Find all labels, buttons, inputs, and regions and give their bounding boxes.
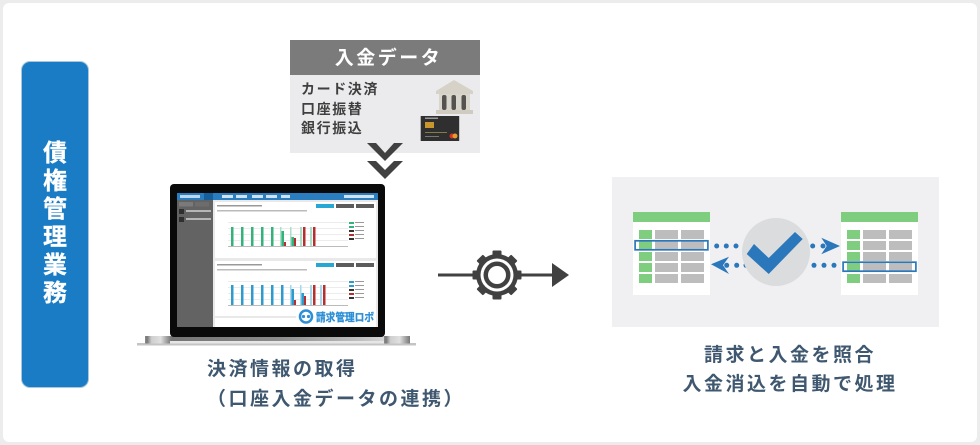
text: reconciliation description: 請求と入金を照合: [704, 345, 876, 366]
sidebar: [177, 200, 213, 327]
text: payment methods: [301, 81, 379, 136]
laptop with billing dashboard: [137, 184, 416, 346]
heading: 入金データ: 入金データ: [335, 48, 442, 69]
text: reconciliation description: 入金消込を自動で処理: [682, 374, 898, 395]
panel: payment data: [290, 40, 480, 153]
chart panel: green: [215, 202, 376, 258]
arrow with gear: [438, 250, 569, 300]
dotted arrow: right: [714, 238, 840, 254]
icon: check mark circle: [742, 218, 810, 286]
icon: bank: [436, 80, 473, 114]
table: left: [633, 212, 710, 295]
panel: category label 債権管理業務: 業: [43, 252, 67, 279]
screen: [177, 193, 378, 327]
laptop bezel: [170, 184, 385, 337]
text: payment info acquisition: 決済情報の取得: [207, 359, 358, 380]
arrow head: [552, 263, 569, 287]
table: right: [841, 212, 918, 295]
panel: category label 債権管理業務: 債: [43, 140, 67, 167]
text: payment methods: 口座振替: [301, 100, 363, 116]
arrow line: [438, 274, 554, 276]
icon: double chevron down: [367, 143, 403, 179]
text: reconciliation description: [682, 344, 898, 395]
text: payment methods: カード決済: [301, 81, 379, 97]
laptop base: [137, 336, 416, 346]
logo: 請求管理ロボ: 請求管理ロボ: [316, 310, 374, 324]
dotted arrow: left: [711, 257, 836, 274]
text: payment info acquisition: [207, 358, 465, 410]
panel: category label 債権管理業務: 権: [43, 168, 67, 195]
chart panel: blue: [215, 261, 376, 316]
text: payment info acquisition: （口座入金データの連携）: [207, 389, 465, 410]
panel: category label 債権管理業務: 管: [43, 196, 67, 223]
logo: 請求管理ロボ: [296, 308, 376, 325]
bottom panel: [215, 318, 376, 327]
app header bar: [177, 193, 378, 200]
icon: gear: [472, 250, 522, 300]
heading bar: [290, 40, 480, 75]
panel: category label 債権管理業務: 務: [43, 280, 67, 307]
icon: credit card: [420, 116, 460, 141]
panel: category label 債権管理業務: 理: [43, 224, 67, 251]
panel: reconciliation: [612, 177, 939, 327]
panel: category label 債権管理業務: [21, 61, 89, 388]
text: payment methods: 銀行振込: [301, 120, 363, 136]
